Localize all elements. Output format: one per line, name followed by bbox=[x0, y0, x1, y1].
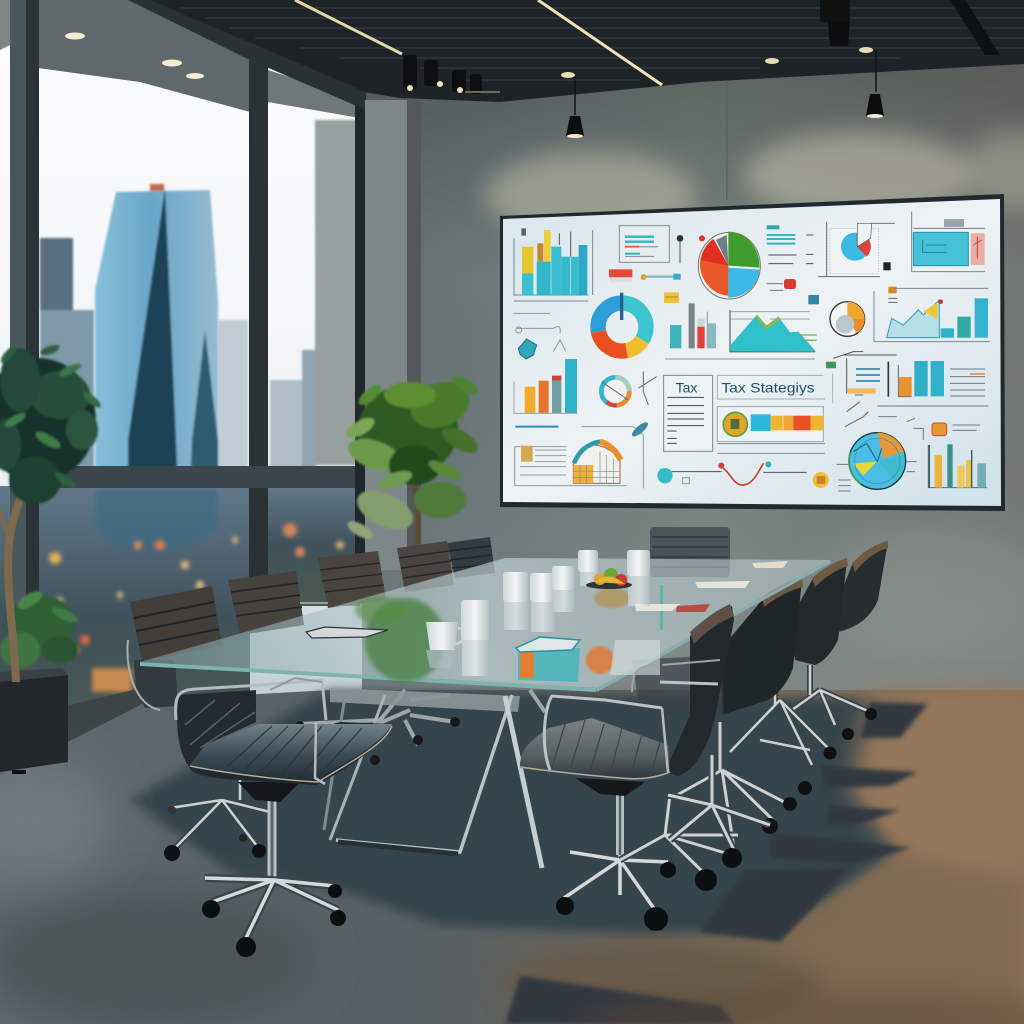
donut chart bbox=[598, 293, 646, 351]
bars and legend right bbox=[877, 361, 988, 406]
right chair 3 bbox=[632, 578, 803, 867]
track lights bbox=[403, 55, 500, 94]
window chair 2 bbox=[228, 571, 328, 635]
window chair 5 bbox=[447, 537, 495, 578]
potted plant behind table bbox=[343, 373, 482, 545]
skyscraper bbox=[95, 184, 218, 490]
pendant lights bbox=[561, 0, 1000, 138]
warm brown reflections bbox=[850, 690, 1024, 900]
left chair back and seat bbox=[176, 678, 392, 785]
tax strategies card bbox=[717, 373, 833, 453]
mountain area chart bbox=[730, 295, 819, 352]
distant buildings bbox=[40, 120, 359, 500]
city lights bbox=[0, 486, 360, 746]
dark polished floor region bbox=[130, 690, 920, 935]
area and bars chart right bbox=[874, 288, 990, 342]
small ring chart bbox=[601, 372, 657, 405]
tax document card: Tax bbox=[676, 379, 697, 395]
small plant in pot bbox=[0, 588, 80, 668]
bar chart bottom right bbox=[928, 444, 987, 488]
bottom edge vignette bbox=[580, 990, 1024, 1024]
glass table top bbox=[140, 550, 831, 692]
window frames bbox=[10, 0, 365, 745]
back right chairs bbox=[632, 541, 888, 867]
front left chair bbox=[164, 678, 392, 957]
pot bbox=[0, 668, 68, 774]
right chair back and seat bbox=[520, 604, 734, 779]
wall-mounted whiteboard bbox=[500, 194, 1005, 511]
ceiling light strips bbox=[295, 0, 662, 85]
teal dashboard panel bbox=[912, 212, 985, 272]
row of chairs along window bbox=[127, 537, 545, 765]
line-drawn mini pie top right bbox=[818, 222, 895, 277]
coffee mugs bbox=[426, 550, 650, 676]
main pie chart bbox=[698, 227, 813, 299]
bottom left document with heat map bbox=[515, 420, 650, 488]
far base chairs bbox=[300, 690, 545, 745]
right chair 5 bbox=[785, 541, 888, 740]
line-art pie right bbox=[830, 287, 897, 336]
table legs and frame bbox=[324, 688, 542, 868]
small left icons bbox=[513, 313, 566, 359]
chair shadows on floor bbox=[505, 702, 928, 1024]
small orange icon and caption bbox=[878, 417, 980, 440]
large blue pie chart bbox=[837, 433, 917, 491]
window ceiling reflection bbox=[38, 0, 250, 112]
right chair base bbox=[556, 755, 770, 931]
right chair 4 bbox=[730, 558, 848, 795]
fruit plate bbox=[586, 568, 632, 589]
tax document card bbox=[664, 375, 713, 451]
front right chair bbox=[520, 604, 770, 931]
timeline curve bbox=[657, 461, 829, 488]
far chair casters bbox=[296, 717, 460, 765]
tree trunk bbox=[0, 465, 32, 682]
far chair at table end bbox=[650, 527, 730, 577]
glass reflections bbox=[355, 585, 663, 682]
tree foliage bbox=[0, 343, 103, 504]
ceiling bbox=[128, 0, 1024, 138]
flow sketch and list right of centre bbox=[826, 352, 897, 427]
floor bbox=[0, 690, 1024, 1024]
window chair 3 bbox=[318, 551, 386, 608]
left chair base bbox=[164, 780, 346, 957]
mid bar cluster bbox=[665, 303, 815, 359]
red label and slider bbox=[609, 269, 681, 303]
concrete column bbox=[365, 100, 421, 570]
notebooks and papers bbox=[306, 561, 788, 652]
window chair 4 bbox=[397, 541, 454, 592]
tax strategies card: Tax Stategiys bbox=[721, 379, 815, 395]
left tree and pot bbox=[0, 343, 103, 774]
window chair 1 bbox=[127, 586, 222, 710]
concrete wall bbox=[360, 50, 1024, 700]
small framed list bbox=[619, 226, 705, 263]
bar chart top left bbox=[514, 228, 593, 301]
window with city view bbox=[0, 0, 365, 746]
orange and teal bar chart bbox=[514, 359, 577, 413]
